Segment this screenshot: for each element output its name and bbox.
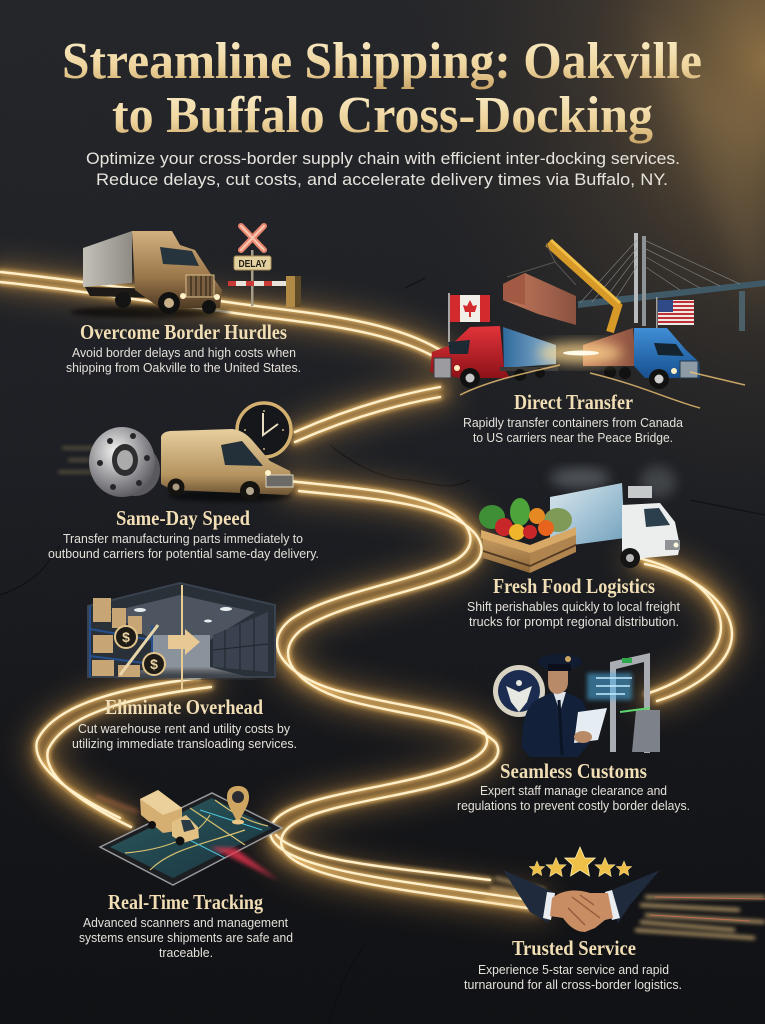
panel: trusted service: [464, 847, 765, 992]
text block: Rapidly transfer containers from Canada: [463, 415, 684, 430]
heading: Seamless Customs: [500, 759, 647, 783]
text block: [463, 415, 684, 445]
title: Streamline Shipping: Oakville: [62, 33, 702, 90]
title: [62, 33, 702, 144]
icon: warehouse interior: [88, 583, 275, 690]
glowing route ribbons: [0, 272, 732, 910]
text block: Cut warehouse rent and utility costs by: [78, 721, 290, 736]
icon: US flag: [656, 297, 694, 332]
heading: Direct Transfer: [514, 390, 633, 414]
icon: light streaks: [485, 878, 765, 938]
icon: light burst between trucks: [460, 342, 745, 408]
icon: customs seal: [493, 665, 545, 717]
icon: red truck with blue container: [430, 326, 558, 388]
icon: clock: [237, 403, 291, 457]
icon: metal wheel flange: [58, 427, 160, 497]
icon: metal detector gate: [610, 653, 660, 753]
icon: dollar coins and arrow: $: [122, 629, 130, 645]
title: to Buffalo Cross-Docking: [112, 87, 653, 144]
icon: refrigerated truck with cold mist: [550, 466, 680, 568]
text block: traceable.: [159, 945, 213, 960]
text block: systems ensure shipments are safe and: [79, 930, 293, 945]
text block: to US carriers near the Peace Bridge.: [473, 430, 673, 445]
text block: Advanced scanners and management: [83, 915, 288, 930]
text block: Shift perishables quickly to local freight: [467, 599, 680, 614]
icon: vegetable crate: [479, 498, 576, 573]
text block: outbound carriers for potential same-day delivery.: [48, 546, 319, 561]
icon: small delivery truck: [140, 790, 199, 846]
subtitle: Reduce delays, cut costs, and accelerate delivery times via Buffalo, NY.: [96, 170, 668, 189]
text block: [457, 783, 690, 813]
text block: [79, 915, 293, 960]
subtitle: [86, 149, 680, 189]
panel: seamless customs: [457, 653, 690, 813]
icon: Canadian flag: [448, 293, 490, 345]
subtitle: Optimize your cross-border supply chain with efficient inter-docking services.: [86, 149, 680, 168]
icon: handshake: [503, 870, 660, 932]
text block: shipping from Oakville to the United States.: [66, 360, 301, 375]
panel: overcome border hurdles: [66, 226, 301, 375]
icon: five stars: [529, 847, 632, 877]
text block: Expert staff manage clearance and: [480, 783, 667, 798]
text block: Experience 5-star service and rapid: [478, 962, 669, 977]
icon: delivery van: [161, 429, 294, 502]
icon: tan semi truck: [70, 231, 230, 318]
text block: regulations to prevent costly border delays.: [457, 798, 690, 813]
icon: location pin: [227, 786, 249, 824]
panel: fresh food logistics: [467, 466, 680, 629]
panel: real-time tracking: [79, 786, 293, 960]
heading: Eliminate Overhead: [105, 695, 263, 719]
icon: tablet with map: [96, 793, 282, 885]
icon: delay sign and barrier: DELAY: [238, 259, 267, 270]
text block: [48, 531, 319, 561]
icon: holographic scan display: [587, 673, 650, 712]
heading: Real-Time Tracking: [108, 890, 263, 914]
text block: utilizing immediate transloading services.: [72, 736, 297, 751]
icon: customs officer: [522, 654, 607, 757]
icon: blue truck with rust container: [583, 328, 700, 389]
text block: [464, 962, 682, 992]
panel: same-day speed: [48, 403, 319, 561]
icon: cable-stayed bridge: [578, 233, 765, 331]
text block: Avoid border delays and high costs when: [72, 345, 296, 360]
icon: dollar coins and arrow: [115, 626, 200, 675]
heading: Trusted Service: [512, 936, 636, 960]
heading: Overcome Border Hurdles: [80, 320, 287, 344]
panel: direct transfer: [430, 233, 765, 445]
panel: eliminate overhead: [72, 583, 297, 751]
icon: delay sign and barrier: [228, 226, 301, 307]
icon: crane and hanging container: [503, 240, 620, 332]
text block: [467, 599, 680, 629]
text block: [72, 721, 297, 751]
heading: Fresh Food Logistics: [493, 574, 655, 598]
text block: Transfer manufacturing parts immediately to: [63, 531, 303, 546]
text block: turnaround for all cross-border logistics.: [464, 977, 682, 992]
heading: Same-Day Speed: [116, 506, 250, 530]
text block: trucks for prompt regional distribution.: [469, 614, 679, 629]
text block: [66, 345, 301, 375]
icon: dollar coins and arrow: $: [150, 656, 158, 672]
